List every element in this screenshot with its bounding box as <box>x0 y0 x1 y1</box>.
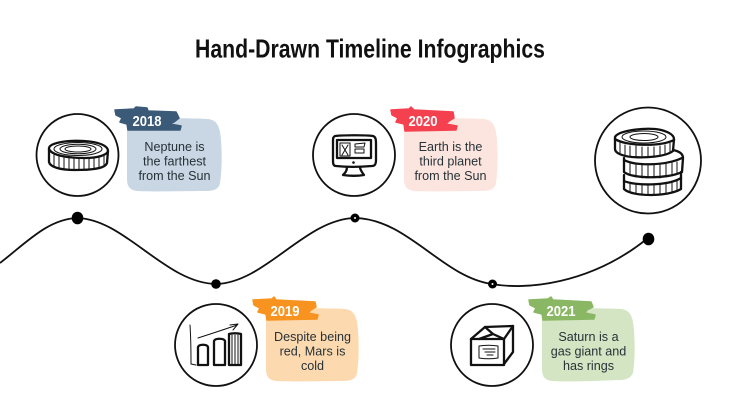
description: Neptune is <box>144 140 205 154</box>
description: has rings <box>563 359 614 373</box>
year: 2018 <box>132 113 162 130</box>
year: 2020 <box>408 113 438 130</box>
description: from the Sun <box>138 169 211 183</box>
milestone: 2020 <box>313 107 498 196</box>
year: 2021 <box>546 303 576 320</box>
description: red, Mars is <box>280 344 345 358</box>
milestone: 2021 <box>451 297 635 386</box>
timeline curve <box>0 212 654 289</box>
text box <box>266 308 359 381</box>
icon: monitor <box>313 114 395 196</box>
marker: 2019 <box>211 279 221 289</box>
description: gas giant and <box>551 344 626 358</box>
year tag <box>529 297 595 320</box>
icon: coin <box>36 114 118 196</box>
title: Hand-Drawn Timeline Infographics <box>195 34 545 64</box>
text box <box>542 308 635 381</box>
year tag <box>253 297 318 320</box>
description: Saturn is a <box>558 330 619 344</box>
text box <box>404 118 498 191</box>
description: Despite being <box>274 330 351 344</box>
milestone: 2019 <box>175 297 359 386</box>
text box <box>127 118 222 191</box>
marker: end <box>643 233 654 245</box>
icon: bar chart <box>175 304 257 386</box>
description: cold <box>301 359 324 373</box>
marker: 2018 <box>72 212 83 224</box>
description: third planet <box>419 154 482 168</box>
bottom coin <box>624 172 681 195</box>
top coin <box>615 129 674 157</box>
description: the farthest <box>143 154 206 168</box>
milestone: 2018 <box>36 107 222 196</box>
marker: 2020 <box>350 214 360 222</box>
icon: box <box>451 304 533 386</box>
year tag <box>115 107 181 130</box>
description: from the Sun <box>414 169 487 183</box>
year: 2019 <box>270 303 300 320</box>
icon: coin stack <box>595 108 701 214</box>
middle coin <box>624 150 683 177</box>
marker: 2021 <box>488 280 497 288</box>
description: Earth is the <box>419 140 482 154</box>
year tag <box>391 107 457 131</box>
